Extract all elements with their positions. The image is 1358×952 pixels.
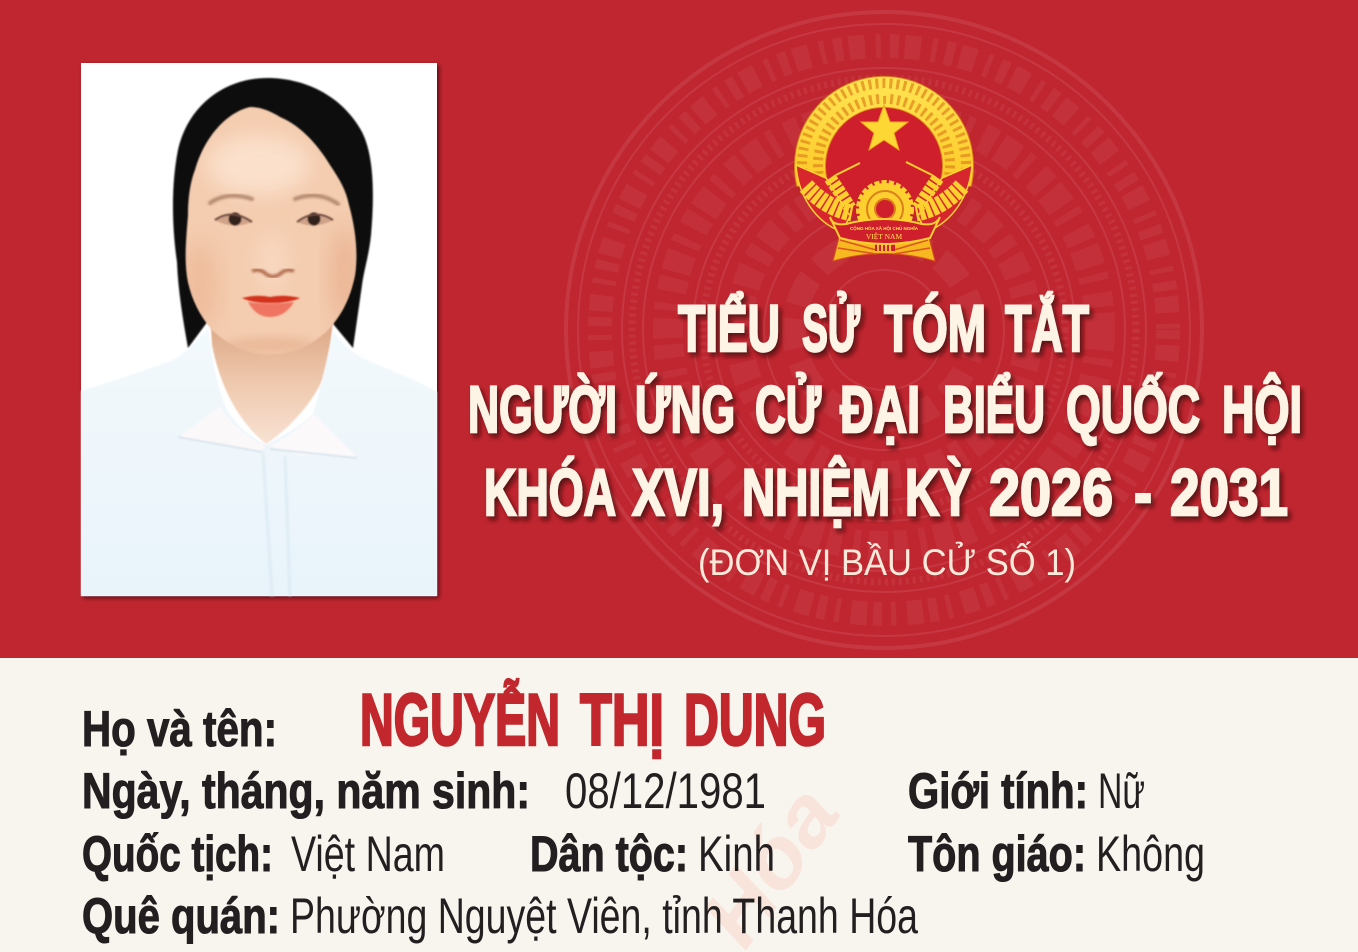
nationality value: Việt Nam xyxy=(291,826,445,882)
title line 3: NHIỆM xyxy=(742,455,890,529)
title line 1 xyxy=(678,291,1089,365)
candidate details xyxy=(82,680,1205,944)
ethnicity value: Kinh xyxy=(698,826,775,882)
title line 1: TÓM xyxy=(884,291,986,365)
red header background xyxy=(0,0,1358,658)
candidate name: NGUYỄN xyxy=(360,680,560,761)
title line 3: 2031 xyxy=(1170,455,1288,529)
hometown label: Quê quán: xyxy=(82,888,280,944)
title line 2: CỬ xyxy=(755,372,821,446)
title line 1: TIỂU xyxy=(678,291,780,365)
title line 3: 2026 xyxy=(989,455,1113,529)
title line 1: SỬ xyxy=(802,291,860,365)
full name label: Họ và tên: xyxy=(82,701,277,757)
title line 3: - xyxy=(1134,455,1152,529)
eyes xyxy=(215,212,333,226)
title line 3: KHÓA xyxy=(484,455,616,529)
portrait photo xyxy=(81,63,437,596)
title xyxy=(468,291,1302,529)
candidate name: DUNG xyxy=(684,680,826,761)
title line 2: HỘI xyxy=(1222,372,1302,446)
facial shading xyxy=(184,135,359,353)
hair xyxy=(173,78,373,348)
emblem: lower wheat xyxy=(806,162,962,213)
title line 2 xyxy=(468,372,1302,446)
date of birth value: 08/12/1981 xyxy=(565,763,766,819)
lips xyxy=(242,296,300,317)
candidate name xyxy=(360,680,826,761)
info panel xyxy=(0,658,1358,952)
gender value: Nữ xyxy=(1098,763,1145,819)
eyebrows xyxy=(210,195,338,204)
nationality label: Quốc tịch: xyxy=(82,826,273,882)
title line 2: ĐẠI xyxy=(840,372,920,446)
nose xyxy=(252,270,294,276)
emblem: cog wheel xyxy=(859,183,911,235)
subtitle: (ĐƠN VỊ BẦU CỬ SỐ 1) xyxy=(698,541,1076,583)
face xyxy=(186,107,356,354)
national emblem xyxy=(796,83,972,261)
title line 2: NGƯỜI xyxy=(468,372,617,446)
emblem: gold star xyxy=(861,105,908,150)
ethnicity label: Dân tộc: xyxy=(530,826,688,882)
shirt collar xyxy=(178,407,357,458)
emblem: pedestal xyxy=(833,234,935,261)
candidate name: THỊ xyxy=(580,680,664,761)
bronze drum pattern xyxy=(566,12,1202,648)
emblem: wheat wreath xyxy=(802,83,966,185)
emblem: banner: CỘNG HÒA XÃ HỘI CHỦ NGHĨA xyxy=(850,224,919,231)
title line 1: TẮT xyxy=(1005,291,1089,365)
gender label: Giới tính: xyxy=(908,763,1088,819)
title line 2: QUỐC xyxy=(1066,372,1200,446)
emblem: banner: VIỆT NAM xyxy=(866,231,902,241)
neck xyxy=(210,310,334,444)
title line 3 xyxy=(484,455,1288,529)
hometown value: Phường Nguyệt Viên, tỉnh Thanh Hóa xyxy=(290,888,918,944)
emblem: side ribbons xyxy=(796,165,972,232)
emblem: top flower xyxy=(880,88,888,96)
title line 3: XVI, xyxy=(632,455,724,529)
title line 2: BIỂU xyxy=(943,372,1045,446)
shirt placket xyxy=(263,452,290,596)
title line 2: ỨNG xyxy=(635,372,735,446)
white shirt xyxy=(81,327,437,596)
date of birth label: Ngày, tháng, năm sinh: xyxy=(82,763,530,819)
religion value: Không xyxy=(1096,826,1205,882)
emblem: banner xyxy=(830,217,940,244)
religion label: Tôn giáo: xyxy=(908,826,1086,882)
title line 3: KỲ xyxy=(905,455,971,529)
emblem: red disc xyxy=(824,103,944,215)
